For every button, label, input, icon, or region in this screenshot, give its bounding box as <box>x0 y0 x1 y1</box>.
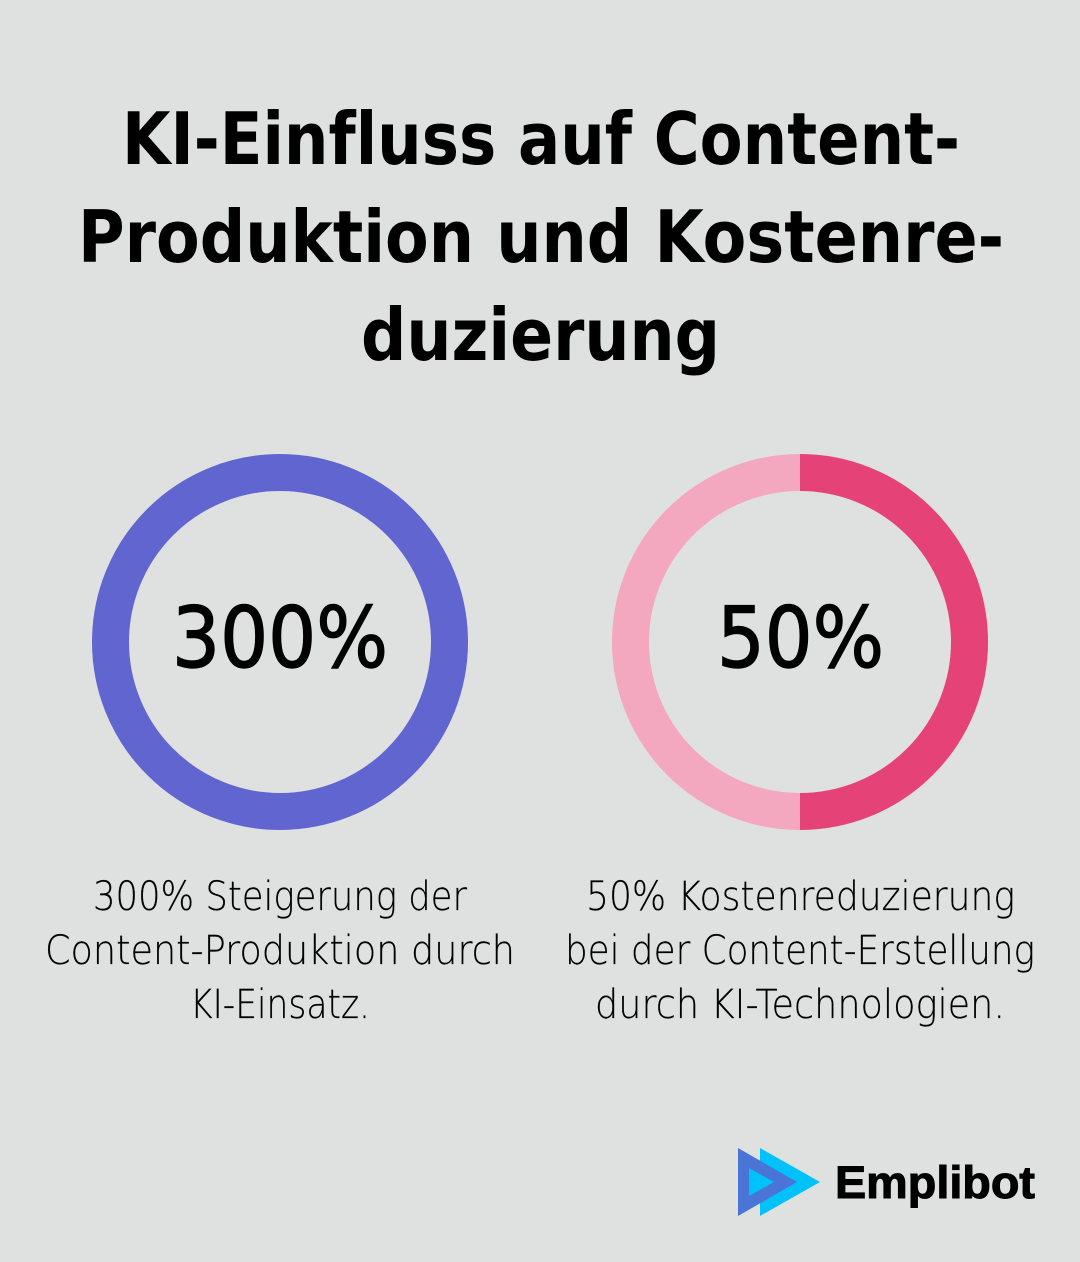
description: 300%: 300% Steigerung der <box>93 874 467 920</box>
logo: Emplibot <box>738 1148 1035 1216</box>
ring chart: 50% <box>630 472 970 812</box>
panel: 300% stat <box>45 472 515 1028</box>
description: 50%: durch KI-Technologien. <box>595 982 1005 1028</box>
value: 300%: 300% <box>172 589 388 687</box>
title: duzierung <box>361 293 720 377</box>
description: 50% <box>565 874 1035 1028</box>
description: 300%: Content-Produktion durch <box>45 928 515 974</box>
description: 300%: KI-Einsatz. <box>190 982 370 1028</box>
title <box>78 97 1004 377</box>
panel: 50% stat <box>565 472 1035 1028</box>
icon: play triangles <box>738 1148 820 1216</box>
ring chart: 300% <box>110 472 450 812</box>
title: KI-Einfluss auf Content- <box>122 97 960 181</box>
description: 50%: bei der Content-Erstellung <box>565 928 1035 974</box>
wordmark: Emplibot <box>835 1157 1035 1208</box>
description: 300% <box>45 874 515 1028</box>
value: 50%: 50% <box>717 589 884 687</box>
description: 50%: 50% Kostenreduzierung <box>586 874 1015 920</box>
